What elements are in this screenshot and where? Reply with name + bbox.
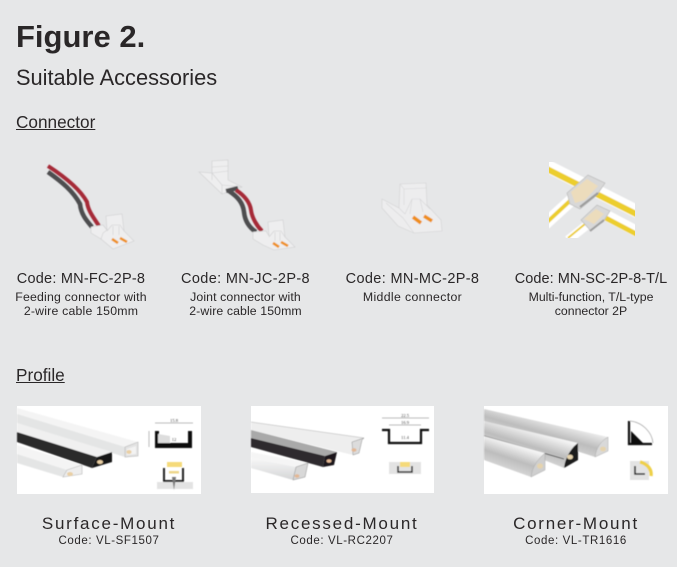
heading: profile: Profile — [16, 365, 65, 385]
connector 1 text: Feeding connector with — [15, 290, 147, 304]
title: Figure 2. — [16, 19, 145, 54]
profile 3 caption: Code: VL-TR1616 — [525, 535, 627, 547]
connector 3 text — [346, 271, 479, 304]
connector 1 text — [15, 271, 147, 318]
profile 1 caption: Surface-Mount — [42, 514, 176, 533]
profile 2 caption: Code: VL-RC2207 — [291, 535, 393, 547]
subtitle: Suitable Accessories — [16, 65, 217, 90]
connector 2 text: Code: MN-JC-2P-8 — [181, 271, 310, 287]
icon: joint connector — [199, 160, 295, 250]
connector 4 text: Code: MN-SC-2P-8-T/L — [515, 271, 667, 287]
illustrations — [16, 160, 668, 494]
panel: surface-mount image — [17, 406, 201, 494]
panel: recessed-mount image: 22.5 — [401, 413, 410, 418]
panel: corner-mount image — [484, 406, 668, 494]
panel: recessed-mount image — [251, 406, 434, 493]
connector 1 text: 2-wire cable 150mm — [24, 304, 138, 318]
heading: connector: Connector — [16, 112, 95, 132]
panel: recessed-mount image: 11.4 — [401, 435, 410, 440]
panel: surface-mount image: 12 — [172, 437, 176, 442]
connector 4 text: Multi-function, T/L-type — [529, 290, 653, 304]
icon: feeding connector — [48, 166, 134, 249]
profile 1 caption: Code: VL-SF1507 — [58, 535, 160, 547]
connector 4 text: connector 2P — [555, 304, 627, 318]
connector 2 text: 2-wire cable 150mm — [189, 304, 302, 318]
icon: multi-function connector — [545, 165, 640, 240]
panel: recessed-mount image: 16.9 — [401, 420, 410, 425]
profile 1 caption — [42, 514, 176, 547]
profile 3 caption — [513, 514, 639, 547]
connector 1 text: Code: MN-FC-2P-8 — [17, 271, 145, 287]
connector 2 text: Joint connector with — [190, 290, 301, 304]
profile 2 caption — [265, 514, 419, 547]
panel: surface-mount image: 15.8 — [170, 418, 179, 423]
icon: middle connector — [382, 183, 442, 233]
connector 3 text: Middle connector — [363, 290, 462, 304]
connector 3 text: Code: MN-MC-2P-8 — [346, 271, 479, 287]
profile 2 caption: Recessed-Mount — [265, 514, 419, 533]
profile 3 caption: Corner-Mount — [513, 514, 639, 533]
connector 2 text — [181, 271, 310, 318]
connector 4 text — [515, 271, 667, 318]
